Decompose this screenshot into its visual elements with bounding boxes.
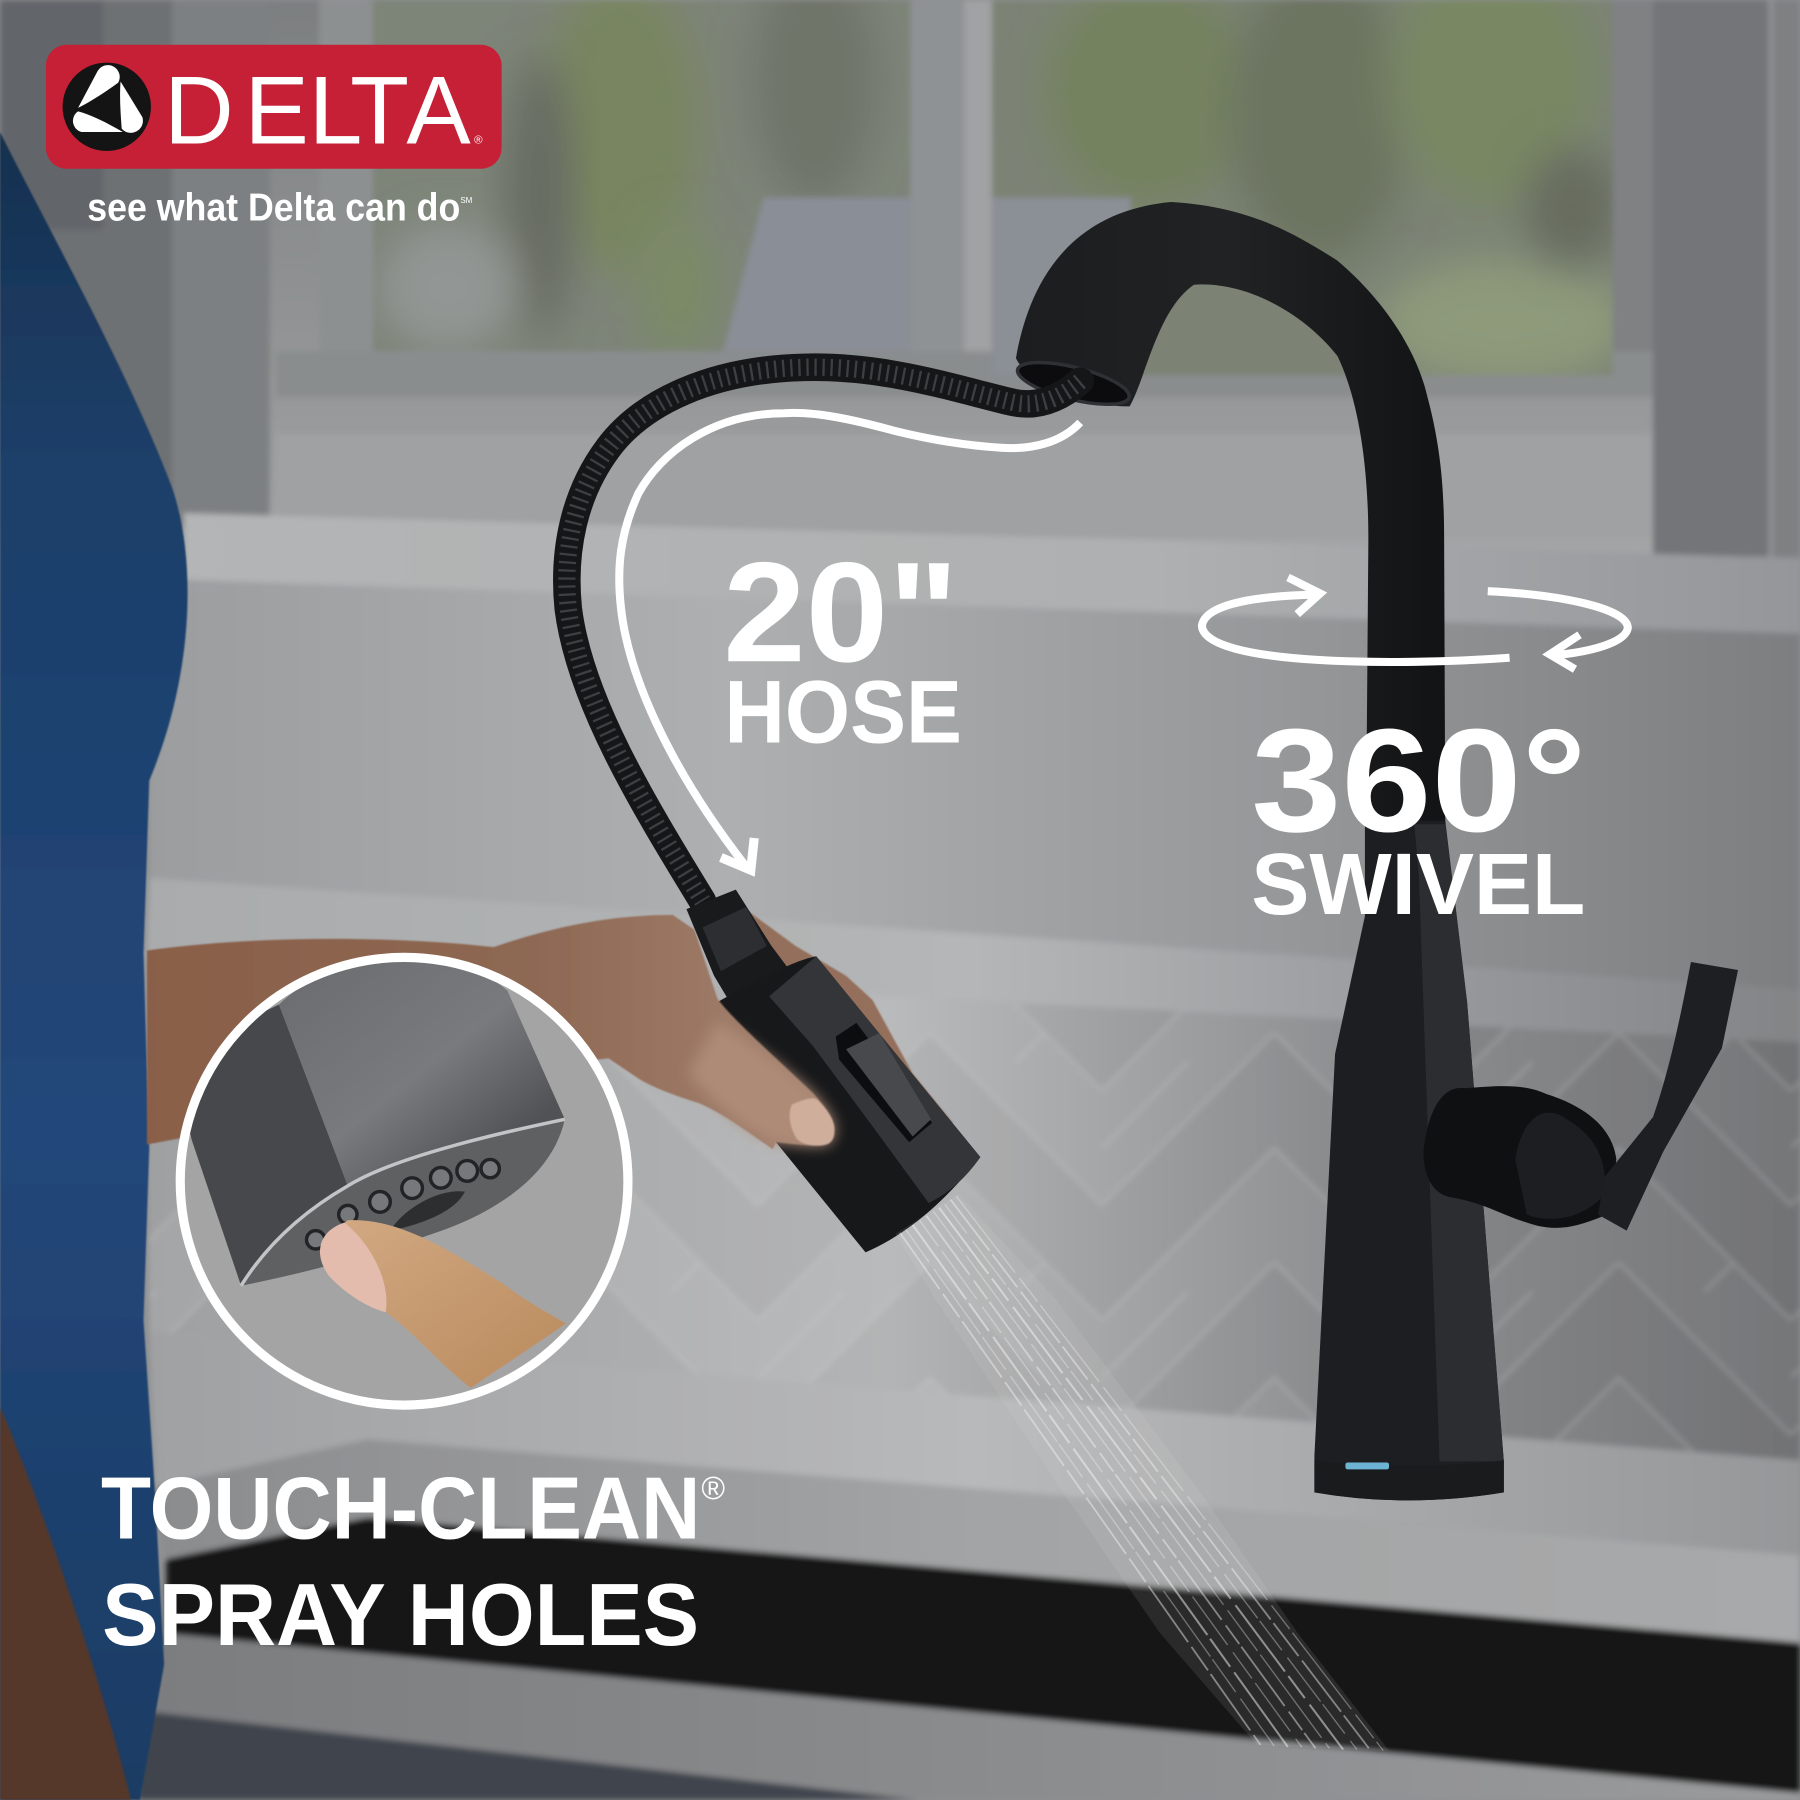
thumb	[689, 1022, 835, 1146]
front edge	[149, 1634, 1800, 1800]
person: blue shirt	[0, 132, 188, 1800]
faucet base body	[1314, 821, 1504, 1500]
pull-down hose	[567, 367, 1080, 901]
label: 360 degree swivel: SWIVEL	[1251, 836, 1585, 933]
water spray	[895, 1194, 1389, 1751]
label: 20 inch hose: 20"	[723, 533, 959, 692]
nozzle dots	[307, 1159, 499, 1249]
counter front band	[155, 1440, 1800, 1643]
upper wall and window frame	[0, 0, 1800, 562]
fingertip	[320, 1220, 566, 1388]
person: far fingers behind sprayer	[735, 901, 953, 1148]
sprayer body	[703, 956, 980, 1252]
countertop surface	[149, 1332, 1800, 1555]
person: lower arm	[0, 1406, 131, 1800]
faucet spout and neck	[1014, 202, 1445, 827]
arrow: hose length	[619, 413, 1080, 870]
label: 360 degree swivel	[1251, 699, 1586, 933]
label: touch-clean spray holes: ®	[701, 1470, 725, 1506]
label: 20 inch hose	[723, 533, 962, 762]
faucet handle	[1423, 962, 1738, 1231]
label: touch-clean spray holes: TOUCH-CLEAN	[101, 1458, 700, 1557]
sprayer close-up	[172, 957, 565, 1286]
shelf band above tile	[146, 878, 1800, 1042]
tagline: SM	[460, 196, 473, 205]
hose collar	[686, 890, 792, 1010]
Delta logo	[46, 45, 502, 169]
logo emblem	[63, 63, 151, 151]
label: 20 inch hose: HOSE	[724, 662, 962, 762]
inset: touch-clean spray holes close-up	[172, 957, 628, 1405]
spout opening	[1014, 354, 1133, 413]
painted wall	[149, 574, 1800, 1045]
sprayer head	[686, 890, 980, 1252]
arrow: swivel left arc	[1202, 577, 1510, 662]
indicator light	[1345, 1462, 1389, 1469]
window pane right with trees	[992, 0, 1630, 385]
thumbnail	[790, 1098, 835, 1146]
label: touch-clean spray holes	[101, 1458, 725, 1664]
person: arm and hand	[147, 915, 835, 1149]
tagline: see what Delta can do	[87, 186, 460, 229]
sink basin	[166, 1518, 1800, 1793]
lit face	[769, 956, 980, 1203]
Delta logo: ®	[474, 134, 483, 146]
arrow: swivel right arc	[1488, 591, 1628, 669]
herringbone tile	[146, 990, 1800, 1461]
window pane left with trees	[373, 0, 910, 356]
Delta logo: DELTA	[164, 57, 471, 164]
label: touch-clean spray holes: SPRAY HOLES	[102, 1565, 699, 1664]
spray toggle button	[836, 1023, 932, 1142]
label: 360 degree swivel: 360°	[1251, 699, 1586, 863]
window ledge	[184, 513, 1800, 634]
